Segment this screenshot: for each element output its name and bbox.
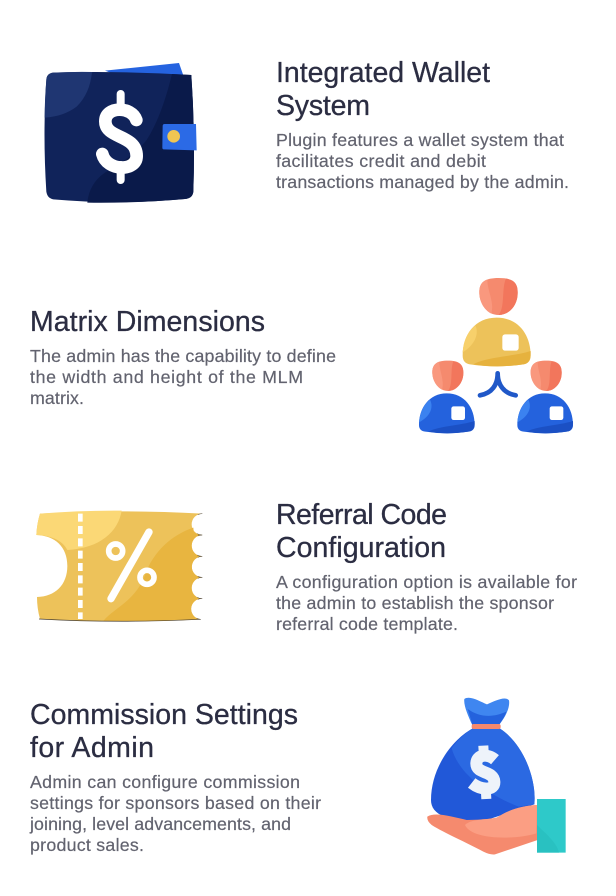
bag dollar sign — [472, 746, 495, 799]
sleeve — [537, 799, 566, 853]
text: wallet description: transactions managed by the admin. — [276, 172, 569, 192]
left person — [419, 361, 475, 433]
text: commission description: joining, level advancements, and — [29, 814, 291, 834]
bag body — [431, 729, 535, 822]
hand — [427, 805, 538, 854]
text: referral description: A configuration option is available for — [276, 572, 577, 592]
heading: Integrated Wallet System: Integrated Wallet — [276, 57, 490, 89]
text: matrix description: The admin has the capability to define — [30, 346, 336, 366]
text: wallet description: facilitates credit and debit — [276, 151, 486, 171]
text: wallet description: Plugin features a wallet system that — [276, 130, 564, 150]
text: commission description: product sales. — [30, 835, 144, 855]
heading: Commission Settings for Admin: for Admin — [30, 732, 154, 764]
heading: Commission Settings for Admin: Commission Settings — [30, 699, 298, 731]
percent glyph — [109, 532, 154, 599]
heading: Commission Settings for Admin — [30, 699, 298, 764]
text: referral description: referral code template. — [276, 614, 458, 634]
heading: Integrated Wallet System — [276, 57, 490, 122]
heading: Referral Code Configuration: Configuration — [276, 532, 446, 564]
bag tie — [472, 724, 501, 729]
text: matrix description — [30, 346, 336, 408]
icon: percent coupon ticket — [36, 511, 202, 621]
icon: wallet — [44, 63, 197, 203]
heading: Matrix Dimensions: Matrix Dimensions — [30, 306, 265, 338]
bag top — [464, 698, 509, 725]
icon: money bag on hand — [427, 698, 566, 854]
connector — [480, 373, 516, 395]
right person — [517, 361, 573, 433]
top person — [463, 278, 531, 366]
text: commission description: Admin can configure commission — [30, 772, 300, 792]
text: commission description — [29, 772, 321, 855]
text: matrix description: the width and height of the MLM — [30, 367, 303, 387]
text: wallet description — [276, 130, 569, 192]
heading: Integrated Wallet System: System — [276, 90, 370, 122]
text: commission description: settings for sponsors based on their — [30, 793, 321, 813]
icon: matrix team hierarchy — [419, 278, 573, 433]
text: matrix description: matrix. — [30, 388, 84, 408]
text: referral description: the admin to establish the sponsor — [276, 593, 554, 613]
heading: Referral Code Configuration — [276, 499, 447, 564]
text: referral description — [276, 572, 577, 634]
icon glyph: dollar sign — [102, 94, 137, 180]
heading: Referral Code Configuration: Referral Code — [276, 499, 447, 531]
